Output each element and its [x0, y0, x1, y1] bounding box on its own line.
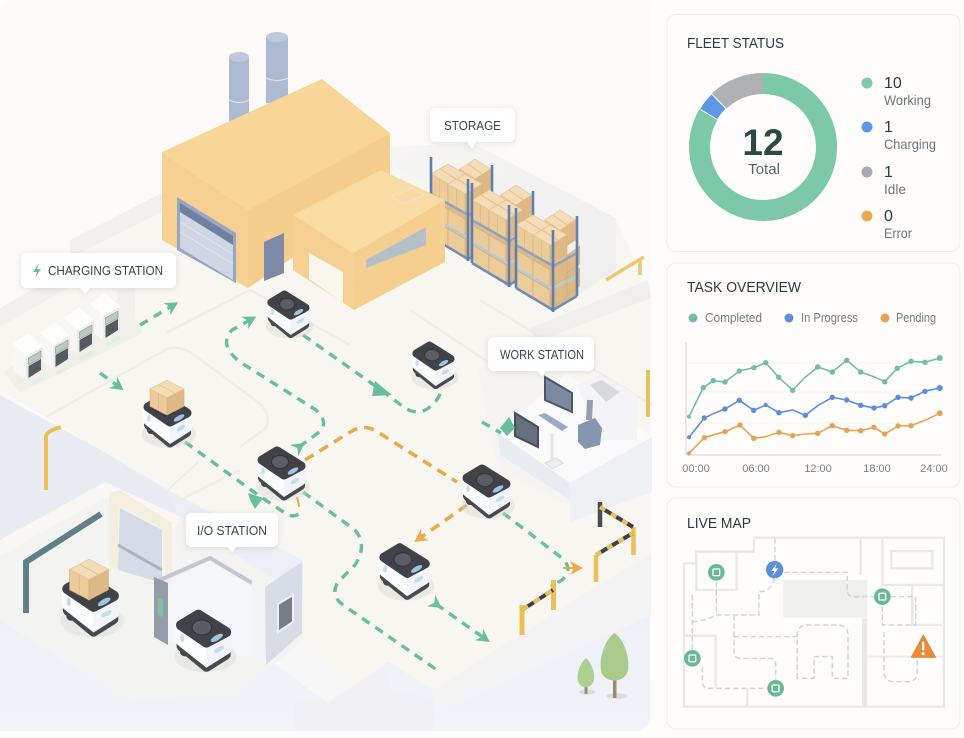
charging marker: [766, 561, 783, 578]
heading: FLEET STATUS: [687, 36, 784, 52]
legend: Idle: [884, 181, 906, 197]
series: in progress: [687, 385, 943, 439]
label: I/O station: I/O STATION: [197, 523, 267, 538]
legend: 10: [884, 75, 902, 92]
label: I/O station: [186, 513, 278, 553]
storage racks: [431, 157, 580, 312]
floor plan: [684, 538, 944, 707]
legend: [862, 75, 936, 241]
safety rail: [46, 427, 61, 490]
map marker: [874, 588, 891, 605]
robot: [256, 451, 310, 501]
barrier: [522, 580, 554, 635]
tree: [577, 658, 595, 694]
label: storage: STORAGE: [444, 118, 501, 133]
routes: [692, 538, 917, 688]
legend: 1: [884, 119, 893, 136]
label: work station: [488, 337, 594, 376]
tree: [601, 633, 628, 699]
factory: [162, 32, 390, 288]
I/O room: [0, 482, 303, 700]
barrier: [596, 502, 634, 582]
robot: [411, 346, 459, 390]
map marker: [684, 650, 701, 667]
door: [264, 233, 284, 281]
heading: LIVE MAP: [687, 516, 751, 532]
x axis labels: [682, 463, 948, 475]
legend: Charging: [884, 136, 936, 152]
I/O station gate: [154, 558, 302, 665]
warning marker: [911, 635, 936, 657]
x axis labels: 06:00: [742, 463, 770, 475]
charging station: [3, 288, 143, 393]
legend: In Progress: [801, 311, 858, 325]
chimneys: [229, 32, 288, 121]
series: completed: [687, 355, 943, 419]
map marker: [767, 680, 784, 697]
label: charging station: [21, 253, 176, 294]
panel: fleet status: [667, 14, 960, 252]
robot: [461, 469, 515, 519]
safety rail: [606, 257, 644, 280]
x axis labels: 00:00: [682, 463, 710, 475]
label: work station: WORK STATION: [500, 347, 584, 362]
panel: task overview: [667, 263, 960, 487]
annex building: [293, 170, 445, 310]
work station: [478, 360, 652, 522]
legend: [688, 311, 936, 325]
heading: TASK OVERVIEW: [687, 280, 801, 296]
legend: Completed: [705, 311, 762, 325]
label: storage: [430, 108, 515, 149]
donut chart: 12: [742, 122, 784, 163]
route: green paths: [100, 306, 568, 672]
x axis labels: 12:00: [804, 463, 832, 475]
label: charging station: CHARGING STATION: [48, 263, 163, 278]
x axis labels: 24:00: [920, 463, 948, 475]
legend: Error: [884, 225, 912, 241]
legend: Pending: [896, 311, 936, 325]
robot carrying box at I/O room: [60, 559, 124, 637]
panel: live map: [667, 498, 960, 729]
series: pending: [687, 410, 943, 455]
route: orange paths: [297, 428, 576, 568]
route: arrowheads: [248, 381, 515, 509]
panel: isometric warehouse scene: [0, 0, 652, 731]
legend: 1: [884, 164, 893, 181]
donut chart: Total: [748, 161, 780, 178]
robot: [378, 548, 434, 600]
robot at I/O gate: [174, 615, 236, 672]
legend: 0: [884, 208, 893, 225]
legend: Working: [884, 92, 931, 108]
donut chart: [689, 73, 837, 221]
roller door: [177, 197, 236, 283]
map marker: [708, 564, 725, 581]
line chart: [682, 342, 948, 475]
robot: [266, 295, 314, 339]
x axis labels: 18:00: [863, 463, 891, 475]
robot carrying box: [142, 380, 196, 448]
